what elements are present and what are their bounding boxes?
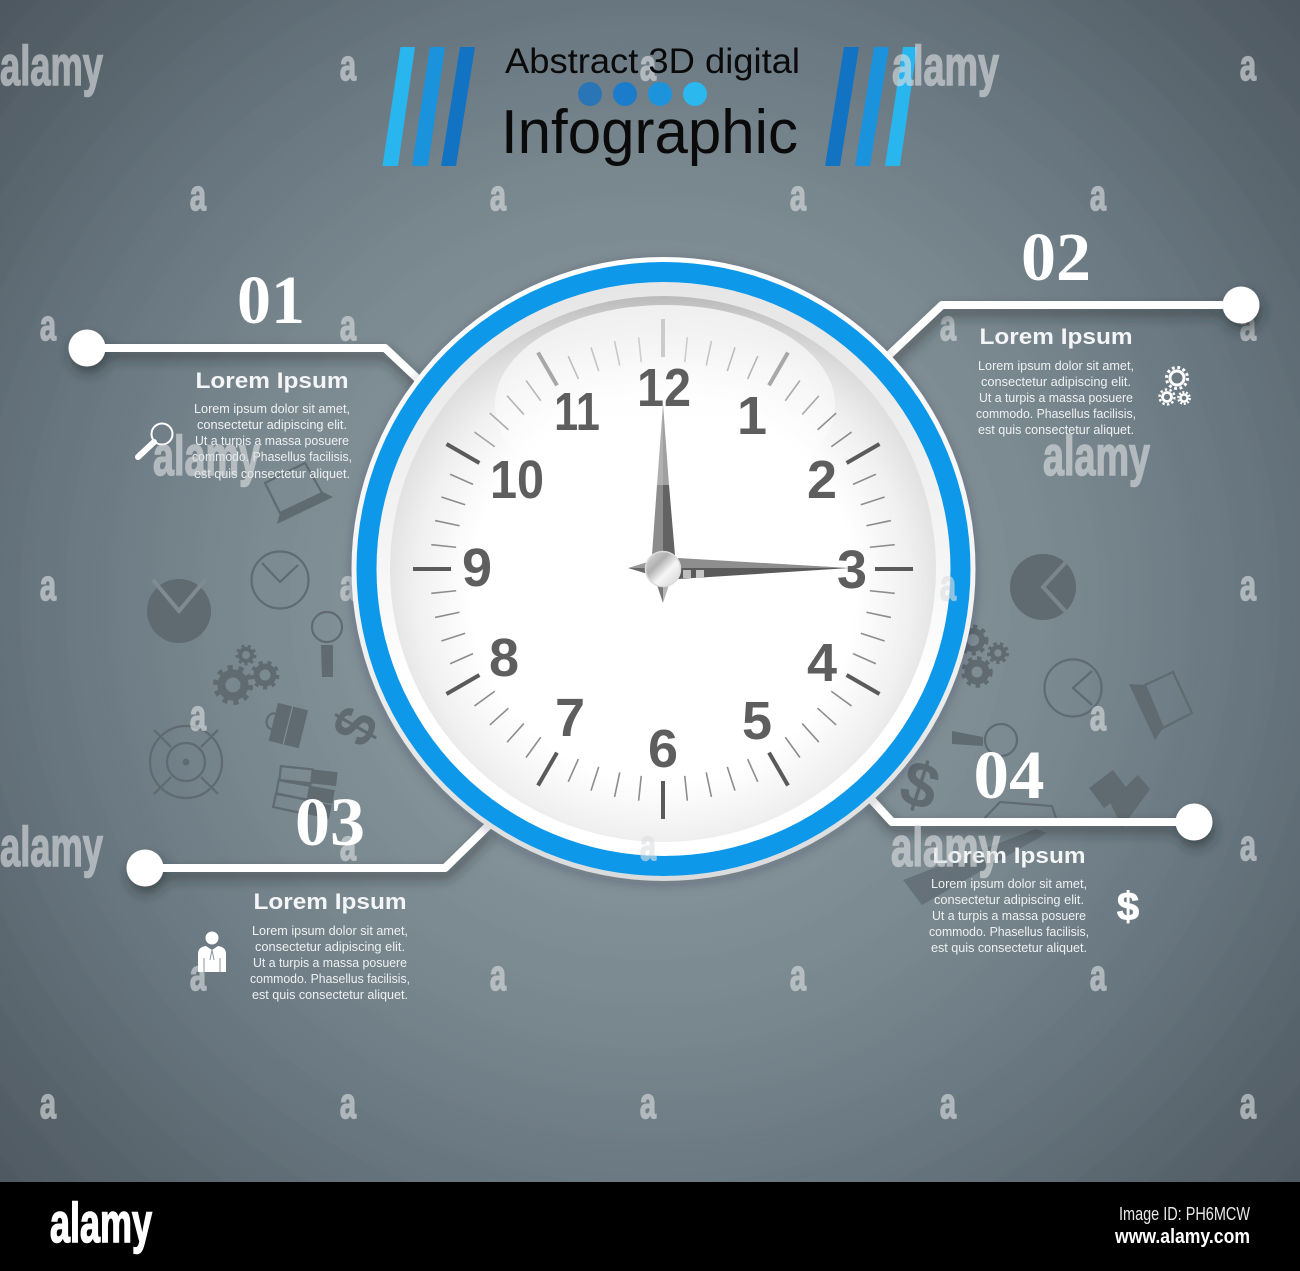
background icons: right cluster bbox=[892, 554, 1192, 905]
panel 01 bbox=[138, 262, 352, 481]
body: est quis consectetur aliquet. bbox=[931, 941, 1087, 955]
heading line 2: Infographic bbox=[501, 98, 798, 167]
watermark pattern: a bbox=[940, 300, 956, 349]
body bbox=[192, 402, 352, 481]
large watermarks bbox=[0, 34, 1150, 878]
body bbox=[976, 359, 1136, 437]
watermark pattern: a bbox=[190, 690, 206, 739]
icon: pie chart bbox=[147, 579, 211, 643]
minor ticks bbox=[431, 337, 895, 801]
watermark pattern: a bbox=[40, 300, 56, 349]
watermark pattern: a bbox=[40, 560, 56, 609]
watermark pattern: a bbox=[490, 170, 506, 219]
website: www.alamy.com bbox=[1114, 1226, 1250, 1248]
watermark pattern: a bbox=[190, 170, 206, 219]
icon: clock bbox=[252, 552, 308, 608]
watermark pattern: a bbox=[640, 40, 656, 89]
watermark on clock rim: a bbox=[640, 820, 656, 869]
body: est quis consectetur aliquet. bbox=[194, 467, 350, 481]
watermark pattern: a bbox=[640, 1078, 656, 1127]
watermark pattern: a bbox=[1240, 560, 1256, 609]
image id: Image ID: PH6MCW bbox=[1119, 1204, 1250, 1224]
watermark pattern: a bbox=[490, 950, 506, 999]
clock rim bbox=[352, 257, 976, 881]
body: Lorem ipsum dolor sit amet, bbox=[194, 402, 350, 416]
body: Lorem ipsum dolor sit amet, bbox=[978, 359, 1134, 373]
icon: pie chart bbox=[1010, 554, 1076, 620]
footer bar bbox=[0, 1182, 1300, 1271]
heading: Lorem Ipsum bbox=[980, 324, 1132, 349]
dial numerals: 2 bbox=[807, 450, 837, 510]
icon: laptop bbox=[265, 463, 333, 524]
icon: gears bbox=[960, 626, 1008, 686]
connector 1 bbox=[68, 330, 419, 380]
watermark pattern: a bbox=[340, 1078, 356, 1127]
watermark pattern: a bbox=[1090, 950, 1106, 999]
body: consectetur adipiscing elit. bbox=[934, 893, 1084, 907]
watermark pattern: a bbox=[40, 1078, 56, 1127]
icon: person bbox=[198, 932, 226, 972]
connector 3 bbox=[126, 826, 488, 886]
watermark pattern: a bbox=[340, 560, 356, 609]
dial numerals: 10 bbox=[490, 449, 544, 510]
body: est quis consectetur aliquet. bbox=[978, 423, 1134, 437]
icon: gears bbox=[1160, 368, 1190, 404]
right stripes bbox=[825, 47, 917, 166]
icon: magnifier bbox=[312, 612, 342, 677]
heading: Lorem Ipsum bbox=[254, 889, 406, 914]
left stripes bbox=[382, 47, 475, 166]
large watermarks: alamy bbox=[0, 34, 103, 97]
body bbox=[929, 877, 1089, 955]
body: Lorem ipsum dolor sit amet, bbox=[252, 924, 408, 938]
body: consectetur adipiscing elit. bbox=[981, 375, 1131, 389]
panel 04 bbox=[929, 737, 1139, 955]
dial numerals: 9 bbox=[462, 538, 492, 598]
large watermarks: alamy bbox=[1043, 424, 1150, 487]
icon: keyboard bbox=[1089, 770, 1150, 828]
watermark on clock rim bbox=[640, 560, 956, 869]
watermark pattern: a bbox=[790, 170, 806, 219]
clock bbox=[352, 257, 976, 881]
icon: dollar: $ bbox=[1117, 885, 1139, 929]
large watermarks: alamy bbox=[891, 815, 1000, 878]
dial numerals: 8 bbox=[489, 628, 519, 688]
dial numerals: 7 bbox=[555, 688, 585, 748]
watermark pattern: a bbox=[1240, 40, 1256, 89]
body: Ut a turpis a massa posuere bbox=[932, 909, 1086, 923]
dial numerals bbox=[462, 357, 867, 779]
watermark pattern: a bbox=[940, 1078, 956, 1127]
background icons: left cluster bbox=[147, 463, 392, 819]
body: est quis consectetur aliquet. bbox=[252, 988, 408, 1002]
watermark pattern: a bbox=[1240, 1078, 1256, 1127]
icon: dollar sign: $ bbox=[892, 745, 948, 825]
heading: Lorem Ipsum bbox=[932, 843, 1086, 868]
dial numerals: 4 bbox=[807, 633, 837, 693]
glass highlight bbox=[495, 305, 835, 505]
dots bbox=[578, 82, 707, 106]
watermark pattern: a bbox=[340, 820, 356, 869]
icon: dollar sign: $ bbox=[319, 696, 392, 756]
hand tails bbox=[628, 562, 670, 603]
icon: briefcase bbox=[262, 701, 308, 748]
watermark pattern: a bbox=[340, 300, 356, 349]
watermark pattern: a bbox=[1090, 690, 1106, 739]
watermark pattern: a bbox=[1090, 170, 1106, 219]
large watermarks: alamy bbox=[0, 815, 103, 878]
body: commodo. Phasellus facilisis, bbox=[929, 925, 1089, 939]
body: commodo. Phasellus facilisis, bbox=[192, 450, 352, 464]
dial numerals: 6 bbox=[648, 719, 678, 779]
body: Ut a turpis a massa posuere bbox=[253, 956, 407, 970]
hub bbox=[646, 552, 680, 586]
clock face bbox=[390, 296, 936, 842]
minute hand bbox=[652, 404, 675, 555]
number: 02 bbox=[1021, 219, 1091, 295]
footer logo: alamy bbox=[50, 1191, 152, 1254]
watermark pattern: a bbox=[1240, 820, 1256, 869]
number: 03 bbox=[295, 784, 365, 860]
watermark pattern: a bbox=[340, 40, 356, 89]
top shading bbox=[390, 296, 936, 842]
body: commodo. Phasellus facilisis, bbox=[250, 972, 410, 986]
body: consectetur adipiscing elit. bbox=[255, 940, 405, 954]
heading: Lorem Ipsum bbox=[196, 368, 348, 393]
connector 4 bbox=[870, 798, 1212, 840]
panel 03 bbox=[198, 784, 410, 1002]
title block bbox=[382, 42, 917, 167]
body: Ut a turpis a massa posuere bbox=[979, 391, 1133, 405]
watermark pattern: a bbox=[190, 950, 206, 999]
icon: target bbox=[150, 726, 222, 798]
body: Lorem ipsum dolor sit amet, bbox=[931, 877, 1087, 891]
major ticks bbox=[413, 319, 913, 819]
icon: magnifier bbox=[952, 724, 1017, 756]
body: commodo. Phasellus facilisis, bbox=[976, 407, 1136, 421]
icon: folder laptop bbox=[903, 802, 1056, 905]
watermark pattern: a bbox=[790, 950, 806, 999]
dial numerals: 5 bbox=[742, 691, 772, 751]
body bbox=[250, 924, 410, 1002]
number: 04 bbox=[974, 737, 1044, 813]
dial numerals: 3 bbox=[837, 540, 867, 600]
heading line 1: Abstract 3D digital bbox=[505, 42, 800, 81]
icon: binders bbox=[273, 766, 338, 819]
watermark on clock rim: a bbox=[940, 560, 956, 609]
hour hand bbox=[678, 558, 850, 579]
body: Ut a turpis a massa posuere bbox=[195, 434, 349, 448]
dial numerals: 12 bbox=[637, 357, 691, 418]
icon: laptop bbox=[1129, 672, 1192, 740]
body: consectetur adipiscing elit. bbox=[197, 418, 347, 432]
dial numerals: 11 bbox=[554, 383, 600, 442]
clock hands bbox=[628, 404, 850, 603]
large watermarks: alamy bbox=[892, 34, 999, 97]
watermark pattern: a bbox=[1240, 300, 1256, 349]
panel 02 bbox=[976, 219, 1190, 437]
icon: clock bbox=[1044, 660, 1102, 716]
icon: magnifier bbox=[138, 424, 172, 457]
connector 2 bbox=[889, 286, 1260, 355]
dial numerals: 1 bbox=[737, 386, 767, 446]
large watermarks: alamy bbox=[153, 424, 260, 487]
icon: gears bbox=[216, 646, 278, 702]
number: 01 bbox=[237, 262, 305, 338]
